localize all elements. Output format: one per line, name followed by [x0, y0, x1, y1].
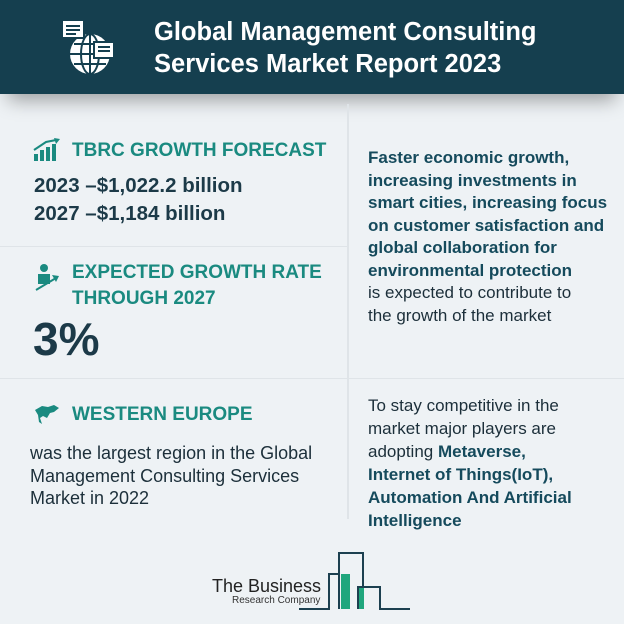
panel: trends: adopting Metaverse,	[368, 442, 526, 461]
icon: person arrow	[36, 264, 59, 291]
icon: map	[35, 405, 59, 424]
panel: trends: market major players are	[368, 419, 556, 438]
title: Services Market Report 2023	[154, 50, 501, 78]
heading: WESTERN EUROPE	[72, 404, 253, 425]
values	[34, 174, 243, 225]
heading: THROUGH 2027	[72, 288, 216, 309]
panel: drivers: Faster economic growth, increasing investments in smart cities, increasing focus on customer satisfaction and global collaboration for environmental protection	[368, 148, 607, 280]
panel: trends	[368, 396, 572, 530]
panel: growth forecast	[34, 138, 326, 225]
value: 3%	[33, 313, 99, 365]
panel: drivers: is expected to contribute to	[368, 283, 571, 302]
heading: TBRC GROWTH FORECAST	[72, 140, 326, 161]
icon: bar chart	[34, 138, 60, 161]
icon: globe with chat bubbles	[63, 21, 113, 74]
logo: Research Company	[232, 595, 320, 606]
heading	[72, 262, 322, 309]
panel: trends: Internet of Things(IoT),	[368, 465, 553, 484]
logo	[212, 552, 410, 610]
panel: drivers: the growth of the market	[368, 306, 551, 324]
text: was the largest region in the Global Management Consulting Services Market in 2022	[30, 443, 312, 508]
logo: The Business	[212, 576, 321, 596]
values: 2023 –$1,022.2 billion	[34, 174, 243, 197]
title	[154, 18, 537, 78]
panel: trends: To stay competitive in the	[368, 396, 559, 415]
panel: growth rate	[33, 262, 322, 365]
panel: trends: Automation And Artificial	[368, 488, 572, 507]
values: 2027 –$1,184 billion	[34, 202, 225, 225]
title: Global Management Consulting	[154, 18, 537, 46]
dividers	[347, 104, 349, 519]
header	[0, 0, 624, 94]
panel: trends: Intelligence	[368, 511, 462, 530]
heading: EXPECTED GROWTH RATE	[72, 262, 322, 283]
panel: western europe	[30, 404, 312, 508]
